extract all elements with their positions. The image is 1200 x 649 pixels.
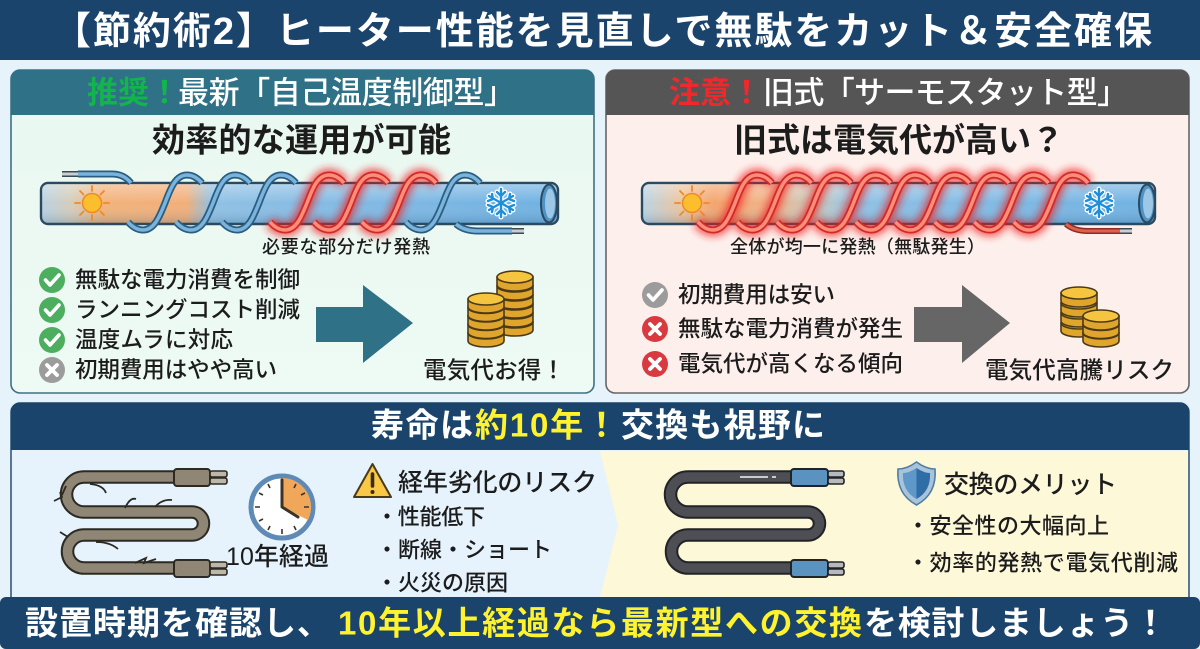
result label: 電気代高騰リスク bbox=[985, 357, 1174, 383]
panel: thermostat heater bbox=[606, 70, 1189, 393]
caption: 全体が均一に発熱（無駄発生） bbox=[730, 236, 985, 257]
icon: new cable bbox=[670, 469, 844, 577]
pros and cons list: 初期費用は安い bbox=[678, 282, 835, 308]
aging risks list: ・断線・ショート bbox=[376, 538, 552, 562]
blue coil bbox=[128, 175, 480, 230]
heat glow bbox=[270, 175, 436, 230]
aging risks list: ・性能低下 bbox=[376, 504, 485, 530]
icon: snowflake bbox=[1086, 189, 1112, 217]
icon: coins bbox=[468, 271, 533, 347]
panel header: caution: 旧式「サーモスタット型」 bbox=[763, 76, 1128, 110]
heading: old type cost: 旧式は電気代が高い？ bbox=[734, 122, 1064, 158]
bottom banner: 設置時期を確認し、 bbox=[25, 604, 330, 642]
icon: warning bbox=[354, 464, 391, 497]
title banner: 【節約術2】ヒーター性能を見直しで無駄をカット＆安全確保 bbox=[53, 11, 1152, 53]
replacement benefits list: ・安全性の大幅向上 bbox=[907, 514, 1109, 538]
red coil bbox=[698, 175, 1088, 230]
panel header: recommended: 推奨！ bbox=[87, 76, 180, 110]
icon: sun bbox=[675, 186, 709, 220]
aging risks list: ・火災の原因 bbox=[376, 570, 508, 596]
aging risks list: 経年劣化のリスク bbox=[398, 469, 597, 497]
title banner bbox=[0, 0, 1200, 60]
heater wires: blue ends bbox=[62, 174, 524, 231]
panel header: lifespan: 交換も視野に bbox=[621, 406, 825, 444]
panel header: recommended bbox=[11, 70, 594, 115]
heater diagram: partial heating bbox=[41, 174, 558, 231]
panel header: caution: 注意！ bbox=[669, 76, 762, 110]
heading: efficient operation: 効率的な運用が可能 bbox=[152, 122, 451, 158]
icon: coins bbox=[1061, 287, 1119, 347]
caption: 必要な部分だけ発熱 bbox=[262, 237, 430, 257]
pros and cons list: 初期費用はやや高い bbox=[75, 358, 277, 382]
pros and cons list: 無駄な電力消費が発生 bbox=[678, 316, 903, 342]
panel: lifespan bbox=[11, 403, 1189, 613]
heater diagram: full heating bbox=[642, 175, 1155, 231]
replacement side background bbox=[600, 451, 1188, 597]
icon: snowflake bbox=[488, 189, 514, 217]
pros and cons list bbox=[39, 267, 300, 383]
arrow bbox=[914, 285, 1010, 363]
pros and cons list bbox=[642, 282, 903, 377]
bottom banner: 10年以上経過なら最新型への交換 bbox=[338, 604, 862, 642]
panel: self-regulating heater bbox=[11, 70, 594, 393]
panel header: lifespan: 約10年！ bbox=[475, 406, 618, 444]
pros and cons list: 電気代が高くなる傾向 bbox=[678, 352, 903, 376]
heater wire end bbox=[1066, 224, 1132, 231]
pros and cons list: 無駄な電力消費を制御 bbox=[75, 268, 300, 292]
pros and cons list: ランニングコスト削減 bbox=[75, 298, 300, 322]
clock label: 10年経過 bbox=[226, 543, 329, 571]
panel header: caution bbox=[606, 70, 1189, 115]
icon: sun bbox=[75, 186, 109, 220]
replacement benefits list: 交換のメリット bbox=[944, 471, 1117, 499]
panel header: lifespan: 寿命は bbox=[371, 406, 473, 444]
panel header: lifespan bbox=[11, 403, 1189, 450]
arrow bbox=[316, 285, 413, 363]
replacement benefits list: ・効率的発熱で電気代削減 bbox=[907, 550, 1178, 576]
result label: 電気代お得！ bbox=[423, 357, 565, 383]
icon: damaged cable bbox=[54, 469, 227, 577]
heat glow bbox=[698, 175, 1088, 230]
bottom banner bbox=[0, 597, 1200, 649]
pros and cons list: 温度ムラに対応 bbox=[75, 328, 233, 352]
replacement benefits list bbox=[907, 471, 1178, 576]
aging risks list bbox=[376, 469, 597, 596]
red coil bbox=[270, 175, 436, 230]
panel header: recommended: 最新「自己温度制御型」 bbox=[178, 76, 515, 110]
icon: clock bbox=[251, 476, 313, 538]
bottom banner: を検討しましょう！ bbox=[864, 604, 1167, 642]
icon: shield bbox=[898, 462, 935, 505]
